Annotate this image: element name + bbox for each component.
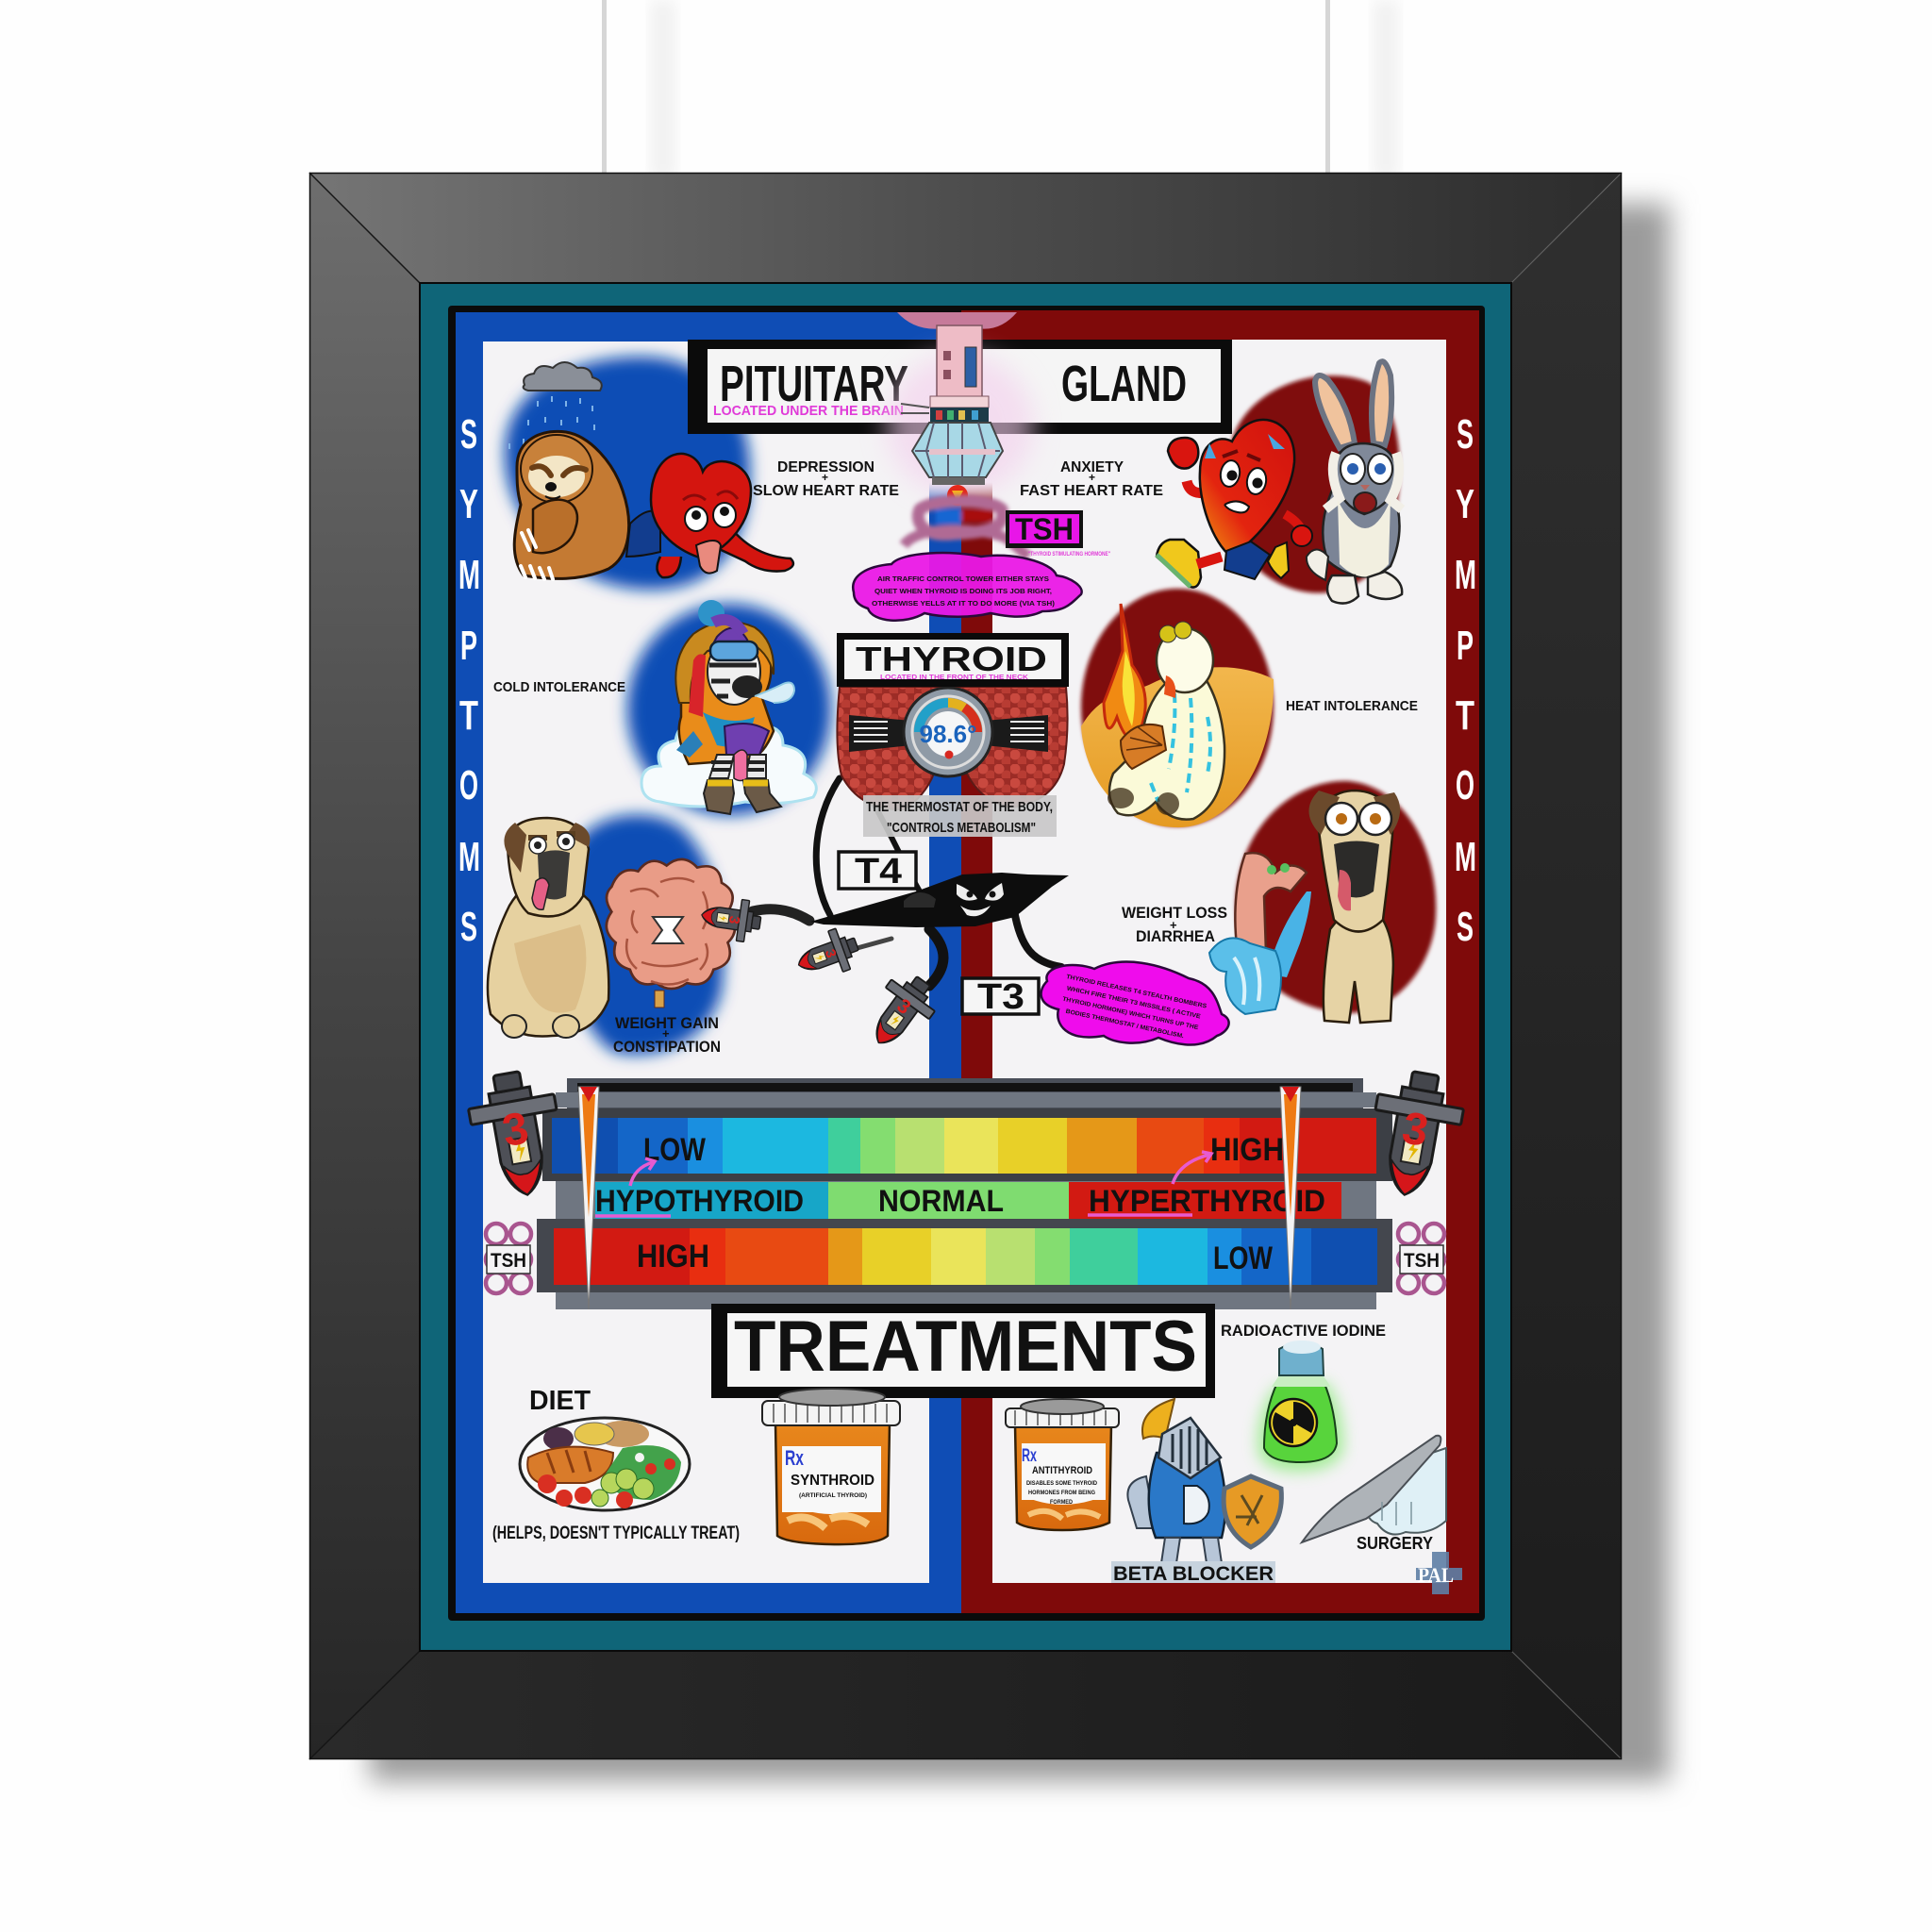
icon: left T3 missile bbox=[463, 1066, 570, 1202]
icon: radioactive iodine shaker bottle bbox=[1257, 1341, 1343, 1472]
text: antithyroid description bbox=[1026, 1480, 1097, 1506]
picture frame bbox=[309, 173, 1622, 1759]
text: thermostat of the body: THE THERMOSTAT OF THE BODY, bbox=[866, 799, 1053, 815]
label: T4: T4 bbox=[855, 852, 902, 891]
title box: pituitary gland bbox=[688, 340, 1232, 434]
text: weight loss + diarrhea: WEIGHT LOSS bbox=[1122, 904, 1227, 922]
label: high: HIGH bbox=[1210, 1132, 1284, 1168]
symptoms label right: M bbox=[1455, 552, 1476, 598]
heading: gland: GLAND bbox=[1061, 356, 1187, 412]
text: anxiety + fast heart rate: + bbox=[1089, 471, 1095, 484]
subheading: located under the brain: LOCATED UNDER THE BRAIN bbox=[713, 403, 904, 419]
text: depression + slow heart rate bbox=[753, 459, 899, 499]
symptoms label left: S bbox=[460, 411, 477, 458]
speech bubble: stealth bombers bbox=[1041, 962, 1229, 1045]
icon: T3 missile large bbox=[857, 965, 945, 1058]
chart frame bbox=[537, 1078, 1392, 1309]
icon: sweating heart running bbox=[1157, 420, 1312, 588]
speech bubble: stealth bombers: BODIES THERMOSTAT / METABOLISM. bbox=[1065, 1008, 1185, 1040]
left needle marker bbox=[578, 1087, 599, 1309]
text: weight gain + constipation: CONSTIPATION bbox=[613, 1038, 721, 1056]
icon: overheated polar bear with flame and fan bbox=[1104, 604, 1224, 820]
symptoms label left: O bbox=[459, 762, 478, 808]
text: diet: DIET bbox=[529, 1386, 591, 1416]
icon: T3 missile hitting intestine bbox=[699, 894, 763, 943]
callout: TSH box: TSH bbox=[1015, 512, 1074, 546]
symptoms label right: S bbox=[1457, 904, 1474, 950]
label: high tsh: HIGH bbox=[637, 1239, 709, 1274]
text: synthroid: SYNTHROID bbox=[791, 1473, 874, 1489]
icon: constipated intestine bbox=[607, 859, 735, 1008]
subheading: located in the front of the neck: LOCATED IN THE FRONT OF THE NECK bbox=[880, 673, 1029, 681]
icon: left T3 missile: 3 bbox=[499, 1103, 532, 1157]
text: thyroid stimulating hormone: "THYROID STIMULATING HORMONE" bbox=[1028, 552, 1110, 558]
symptoms label right: O bbox=[1456, 762, 1474, 808]
text: Rx: Rx bbox=[785, 1446, 805, 1470]
poster background blue and red bbox=[456, 310, 1479, 1613]
thyroid title box bbox=[837, 633, 1069, 687]
label: T3 bbox=[962, 977, 1039, 1017]
text: weight loss + diarrhea: DIARRHEA bbox=[1136, 927, 1215, 945]
label: hyperthyroid: HYPERTHYROID bbox=[1089, 1184, 1325, 1218]
hanging strips bbox=[602, 0, 1330, 174]
callout: TSH box bbox=[1006, 510, 1110, 558]
label: low tsh: LOW bbox=[1213, 1241, 1274, 1276]
text: helps, does not typically treat: (HELPS, DOESN'T TYPICALLY TREAT) bbox=[492, 1524, 740, 1543]
symptoms label left: T bbox=[459, 692, 478, 739]
text: antithyroid description: HORMONES FROM BEING bbox=[1028, 1490, 1095, 1496]
text: antithyroid: ANTITHYROID bbox=[1032, 1465, 1092, 1476]
text: depression + slow heart rate: + bbox=[822, 471, 828, 484]
icon: sad heart bbox=[626, 454, 793, 577]
text: antithyroid description: FORMED bbox=[1050, 1499, 1073, 1506]
speech bubble: air traffic control tower: AIR TRAFFIC CONTROL TOWER EITHER STAYS bbox=[877, 575, 1049, 583]
logo: PAL bbox=[1416, 1552, 1462, 1594]
blue background blobs bbox=[505, 357, 831, 1055]
heading: treatments: TREATMENTS bbox=[734, 1307, 1197, 1387]
text: artificial thyroid: (ARTIFICIAL THYROID) bbox=[799, 1492, 867, 1499]
text: thermostat of the body bbox=[863, 795, 1057, 837]
middle classification bar bbox=[595, 1182, 1341, 1219]
icon: right T3 missile bbox=[1362, 1066, 1469, 1202]
text: weight loss + diarrhea: + bbox=[1170, 918, 1177, 932]
logo: PAL: PAL bbox=[1418, 1563, 1454, 1587]
icon: sad fat pug bbox=[488, 818, 608, 1038]
TSH and T3/T4 level chart bbox=[463, 1066, 1469, 1309]
black poster border bbox=[448, 306, 1485, 1621]
icon: gloved hand with scalpel bbox=[1302, 1436, 1446, 1542]
label: T4 bbox=[839, 852, 916, 891]
text: Rx: Rx bbox=[1022, 1446, 1037, 1466]
text: weight gain + constipation: + bbox=[662, 1026, 670, 1041]
icon: cold zebra on cloud bbox=[641, 600, 816, 814]
symptoms label left: M bbox=[458, 552, 480, 598]
right needle marker bbox=[1280, 1087, 1301, 1309]
icon: right TSH molecule: TSH bbox=[1404, 1250, 1440, 1272]
speech bubble: stealth bombers: THYROID RELEASES T4 STEALTH BOMBERS bbox=[1066, 974, 1208, 1010]
text: beta blocker: BETA BLOCKER bbox=[1113, 1563, 1274, 1585]
icon: thermostat gauge bbox=[904, 688, 992, 776]
text: anxiety + fast heart rate: FAST HEART RATE bbox=[1020, 483, 1163, 499]
top scale bar: T3 and T4 levels bbox=[552, 1118, 1376, 1174]
icon: thyroid lobes bbox=[837, 687, 1068, 809]
symptoms label left: M bbox=[458, 834, 480, 880]
speech bubble: air traffic control tower: OTHERWISE YELLS AT IT TO DO MORE (VIA TSH) bbox=[872, 599, 1056, 608]
icon: plate of food bbox=[520, 1418, 690, 1510]
text: weight gain + constipation bbox=[613, 1014, 721, 1056]
symptoms label left: P bbox=[460, 623, 477, 669]
icon: T3 missile falling: 3 bbox=[822, 947, 840, 960]
label: T3: T3 bbox=[977, 977, 1024, 1017]
icon: right T3 missile: 3 bbox=[1398, 1103, 1432, 1157]
text: weight loss + diarrhea bbox=[1122, 904, 1227, 945]
symptoms label right: T bbox=[1456, 692, 1474, 739]
frame drop shadow bbox=[370, 204, 1670, 1781]
icon: T3 missile large: 3 bbox=[892, 995, 914, 1019]
text: thermostat of the body: "CONTROLS METABOLISM" bbox=[887, 820, 1036, 836]
speech bubble: stealth bombers: THYROID HORMONE) WHICH TURNS UP THE bbox=[1062, 996, 1199, 1031]
teal mat bbox=[420, 283, 1511, 1651]
label: normal: NORMAL bbox=[878, 1184, 1004, 1218]
desert in heat blob bbox=[1081, 667, 1274, 827]
icon: right TSH molecule bbox=[1398, 1224, 1444, 1293]
symptoms label right bbox=[1455, 411, 1476, 950]
icon: air traffic control tower bbox=[887, 312, 1034, 506]
text: anxiety + fast heart rate: ANXIETY bbox=[1060, 459, 1124, 475]
bottom scale bar: TSH levels bbox=[554, 1228, 1377, 1285]
icon: scared rabbit bbox=[1307, 361, 1402, 604]
symptoms label right: S bbox=[1457, 411, 1474, 458]
symptoms label left: S bbox=[460, 904, 477, 950]
fuzzy TSH signal cloud bbox=[904, 501, 1028, 557]
label: hypothyroid: HYPOTHYROID bbox=[595, 1184, 804, 1218]
text: weight gain + constipation: WEIGHT GAIN bbox=[615, 1014, 719, 1032]
icon: antithyroid bottle bbox=[1006, 1399, 1119, 1530]
icon: synthroid bottle bbox=[762, 1389, 900, 1544]
symptoms label right: P bbox=[1457, 623, 1474, 669]
icon: startled thin pug bbox=[1308, 791, 1400, 1023]
icon: T3 missile hitting intestine: 3 bbox=[725, 915, 742, 924]
arrows from thyroid to bomber bbox=[753, 778, 1061, 986]
icon: left TSH molecule: TSH bbox=[491, 1250, 526, 1272]
gland label: thermostat thyroid bbox=[837, 687, 1068, 809]
icon: sad sloth bbox=[514, 431, 629, 579]
heading: pituitary: PITUITARY bbox=[720, 356, 908, 412]
speech bubble: air traffic control tower: QUIET WHEN THYROID IS DOING ITS JOB RIGHT, bbox=[874, 587, 1052, 595]
text: depression + slow heart rate: SLOW HEART RATE bbox=[753, 483, 899, 499]
symptoms label left: Y bbox=[459, 481, 478, 527]
icon: left TSH molecule bbox=[486, 1224, 531, 1293]
icon: stealth bomber bbox=[810, 873, 1069, 927]
icon: T3 missile falling bbox=[791, 924, 864, 985]
label: low: LOW bbox=[643, 1132, 707, 1168]
text: antithyroid description: DISABLES SOME THYROID bbox=[1026, 1480, 1097, 1487]
white content panels bbox=[483, 340, 1446, 1583]
heading: thyroid: THYROID bbox=[856, 640, 1047, 678]
text: depression + slow heart rate: DEPRESSION bbox=[777, 459, 874, 475]
symptoms label right: Y bbox=[1456, 481, 1474, 527]
symptoms label right: M bbox=[1455, 834, 1476, 880]
icon: happy water intestine bbox=[1209, 853, 1311, 1014]
icon: rain cloud bbox=[509, 362, 602, 449]
text: cold intolerance: COLD INTOLERANCE bbox=[493, 679, 625, 695]
speech bubble: stealth bombers: WHICH FIRE THEIR T3 MISSILES ( ACTIVE bbox=[1066, 985, 1202, 1021]
icon: beta blocker knight bbox=[1127, 1399, 1281, 1563]
icon: black connector fins bbox=[849, 715, 1048, 752]
text: radioactive iodine: RADIOACTIVE IODINE bbox=[1221, 1322, 1386, 1340]
magenta prefix underlines and arrows bbox=[595, 1152, 1211, 1216]
symptoms label left bbox=[458, 411, 480, 950]
speech bubble: air traffic control tower bbox=[853, 553, 1082, 621]
red background blobs bbox=[1081, 375, 1436, 1013]
text: anxiety + fast heart rate bbox=[1020, 459, 1163, 499]
text: surgery: SURGERY bbox=[1357, 1534, 1433, 1553]
text: heat intolerance: HEAT INTOLERANCE bbox=[1286, 698, 1418, 714]
icon: thermostat gauge: 98.6° bbox=[919, 720, 977, 748]
